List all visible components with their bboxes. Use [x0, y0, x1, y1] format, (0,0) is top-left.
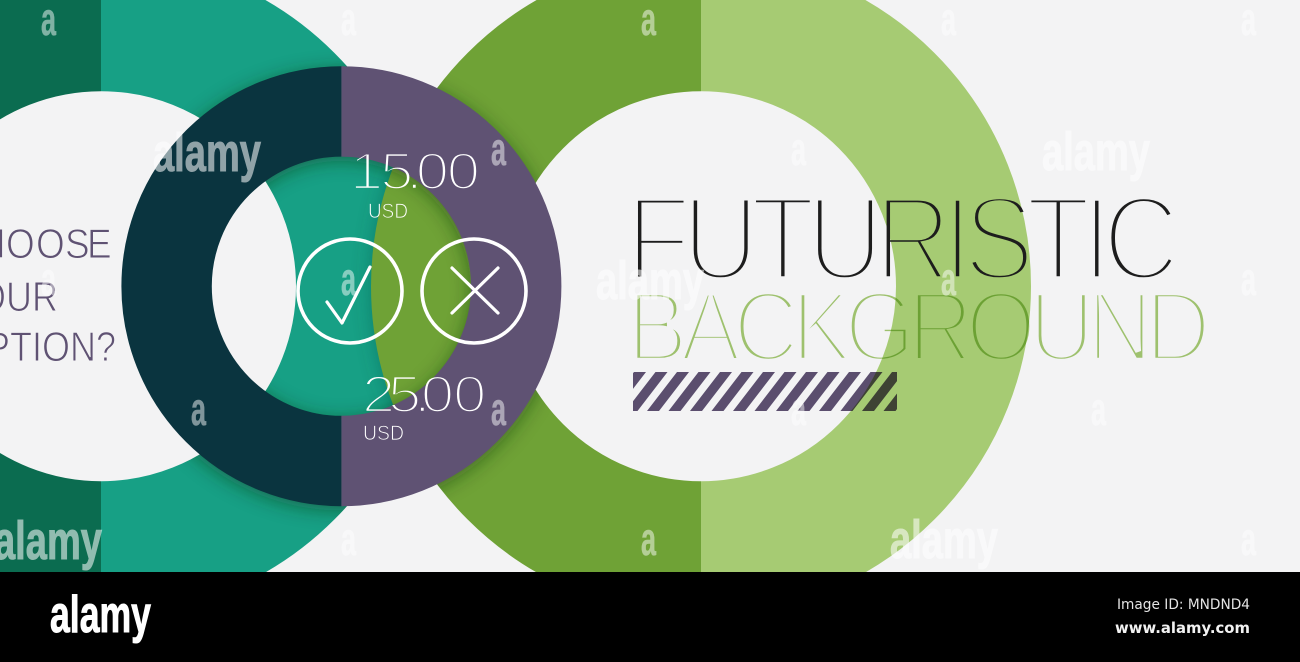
watermark: repeated a marks	[42, 10, 956, 556]
icon: check mark in circle	[298, 239, 402, 343]
site address: www.alamy.com	[1115, 619, 1250, 637]
watermark: repeated a marks: a	[41, 253, 56, 305]
watermark: repeated a marks: a	[191, 383, 206, 435]
footer bar	[0, 572, 1300, 662]
question text: choose your option	[0, 229, 114, 361]
centre ring: navy and purple halves	[167, 111, 516, 461]
image id: Image ID: MNDND4	[1117, 597, 1250, 613]
striped bar	[633, 372, 897, 411]
watermark: repeated a marks: a	[341, 513, 356, 565]
watermark: repeated a marks: a	[641, 513, 656, 565]
watermark: repeated a marks: a	[791, 383, 806, 435]
heading: futuristic: FUTURISTIC	[626, 172, 1176, 307]
watermark: repeated a marks: a	[491, 123, 506, 175]
watermark: large alamy logos: alamy	[596, 251, 704, 311]
watermark: repeated a marks: a	[341, 253, 356, 305]
watermark: large alamy logos: alamy	[890, 510, 998, 570]
price: 15.00 USD: 15.00	[350, 142, 480, 200]
price: 15.00 USD: USD	[368, 200, 408, 223]
shadow of right ring on left ring	[365, 166, 393, 406]
right ring: green and light green halves	[438, 24, 964, 549]
price: 25.00 USD	[364, 377, 483, 440]
footer logo: alamy	[50, 586, 151, 644]
icon: cross in circle	[422, 239, 526, 343]
watermark: repeated a marks: a	[1091, 383, 1106, 435]
watermark: repeated a marks: a	[791, 123, 806, 175]
heading: background: BACKGROUND	[627, 271, 1207, 383]
left ring: dark green and teal halves	[0, 24, 364, 549]
watermark: repeated a marks: a	[941, 253, 956, 305]
price: 25.00 USD: USD	[363, 422, 404, 445]
shadow of centre ring	[167, 115, 516, 465]
watermark: large alamy logos: alamy	[1042, 122, 1150, 182]
watermark: large alamy logos	[0, 134, 920, 570]
watermark: repeated a marks: a	[491, 383, 506, 435]
price: 25.00 USD: 25.00	[362, 365, 486, 423]
watermark: repeated a marks: a	[1241, 253, 1256, 305]
price: 15.00 USD	[356, 154, 476, 218]
watermark: large alamy logos: alamy	[153, 123, 261, 183]
watermark: repeated a marks: a	[1241, 513, 1256, 565]
